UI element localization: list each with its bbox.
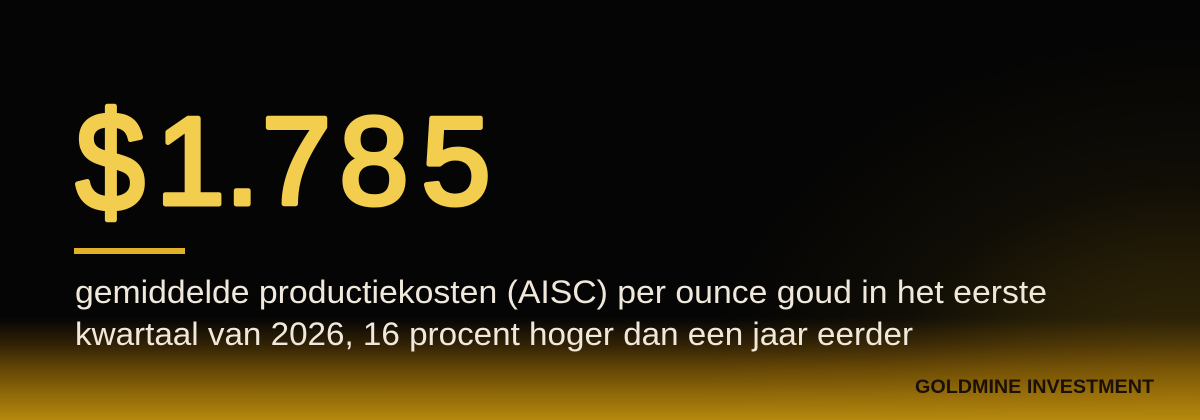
description: gemiddelde productiekosten (AISC) per ounce goud in het eerste [75,274,1047,310]
description: kwartaal van 2026, 16 procent hoger dan een jaar eerder [75,316,913,352]
source label: GOLDMINE INVESTMENT [915,376,1154,398]
headline number: $ [76,84,145,240]
accent rule [74,248,185,254]
headline number: 1.785 [156,93,490,231]
description [75,274,1047,352]
